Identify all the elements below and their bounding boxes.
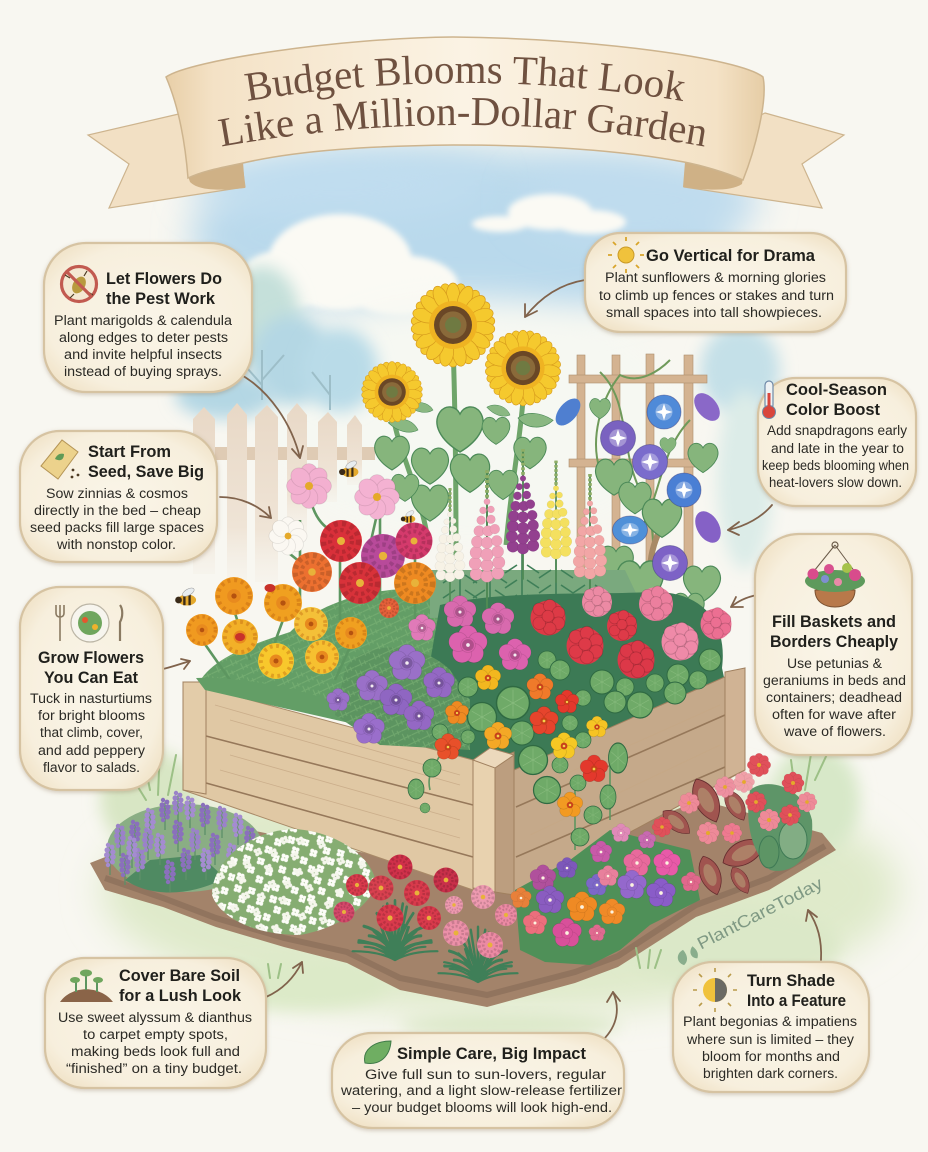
lavender bush (104, 791, 263, 893)
box posts (183, 668, 745, 895)
soil bed (90, 800, 836, 1007)
arrow: cool season (728, 505, 772, 535)
panel: Start From Seed, Save Big: seed packs fill large spaces (30, 520, 204, 535)
panel: Turn Shade Into a Feature: Turn Shade (747, 971, 835, 990)
panel: Grow Flowers You Can Eat: You Can Eat (44, 668, 138, 687)
panel: Cover Bare Soil for a Lush Look: making beds look full and (71, 1044, 240, 1059)
panel: Fill Baskets and Borders Cheaply: Borders Cheaply (770, 632, 899, 651)
panel: Fill Baskets and Borders Cheaply (755, 534, 912, 755)
background trees (175, 266, 773, 570)
panel: Start From Seed, Save Big: Seed, Save Big (88, 462, 204, 481)
alyssum mound (212, 829, 376, 935)
panel: Let Flowers Do the Pest Work: Let Flowers Do (106, 269, 222, 288)
panel: Turn Shade Into a Feature: brighten dark corners. (703, 1066, 838, 1081)
title banner (86, 36, 846, 209)
arrow: seed (220, 497, 271, 518)
panel: Turn Shade Into a Feature: bloom for months and (702, 1049, 840, 1064)
morning glories on trellis (551, 360, 726, 625)
panel: Grow Flowers You Can Eat (20, 587, 163, 790)
icon: thermometer (762, 381, 776, 418)
icon: seed packet (41, 440, 79, 479)
panel: Cover Bare Soil for a Lush Look: to carpet empty spots, (83, 1027, 228, 1042)
panel: Cover Bare Soil for a Lush Look: “finished” on a tiny budget. (66, 1061, 242, 1076)
begonia clump (652, 753, 817, 898)
right ribbon tail (684, 113, 844, 208)
trellis (569, 354, 707, 575)
panel: Go Vertical for Drama: small spaces into tall showpieces. (606, 305, 822, 320)
panel: Turn Shade Into a Feature: Into a Feature (747, 991, 846, 1010)
panel: Cover Bare Soil for a Lush Look: for a Lush Look (119, 986, 242, 1005)
watercolor sky and clouds (190, 150, 780, 540)
panel: Cool-Season Color Boost (758, 378, 916, 506)
left face of box (183, 682, 473, 890)
foliage mass (196, 505, 725, 775)
panel: Cool-Season Color Boost: and late in the year to (771, 441, 904, 456)
panel: Grow Flowers You Can Eat: flavor to salads. (43, 760, 140, 775)
banner title: Like a Million-Dollar Garden (218, 98, 704, 146)
panel: Let Flowers Do the Pest Work: Plant marigolds & calendula (54, 313, 233, 328)
arrow: edible (163, 659, 190, 669)
icon: half sun half shade (693, 968, 737, 1012)
panel: Start From Seed, Save Big (20, 431, 217, 562)
geraniums and round leaves (530, 586, 732, 718)
panel: Fill Baskets and Borders Cheaply: Use petunias & (787, 656, 882, 671)
panel: Let Flowers Do the Pest Work: the Pest Work (106, 289, 216, 308)
panel: Fill Baskets and Borders Cheaply: geraniums in beds and (763, 673, 906, 688)
arrow: pests (238, 373, 303, 458)
panel: Let Flowers Do the Pest Work: along edges to deter pests (59, 330, 228, 345)
arrow: care (603, 992, 620, 1040)
panel: Fill Baskets and Borders Cheaply: Fill Baskets and (772, 612, 896, 631)
panel: Grow Flowers You Can Eat: and add peppery (38, 743, 145, 758)
panel: Cover Bare Soil for a Lush Look: Cover Bare Soil (119, 966, 240, 985)
panel: Fill Baskets and Borders Cheaply: containers; deadhead (766, 690, 902, 705)
banner title: Budget Blooms That Look (244, 56, 685, 102)
panel: Simple Care, Big Impact: – your budget blooms will look high-end. (352, 1100, 612, 1115)
grass tufts (130, 747, 829, 978)
banner title (218, 56, 704, 146)
impatiens border (511, 823, 701, 965)
panel: Cool-Season Color Boost: keep beds blooming when (762, 458, 909, 473)
panel: Let Flowers Do the Pest Work: instead of buying sprays. (64, 364, 222, 379)
watermark: PlantCareToday: PlantCareToday (694, 874, 826, 953)
arrows (163, 280, 821, 1040)
icon: soil mound with seedlings (60, 970, 113, 1002)
icon: sun (608, 237, 644, 273)
left scroll curl (188, 162, 245, 190)
panel: Start From Seed, Save Big: Start From (88, 442, 171, 461)
marigolds (186, 577, 367, 679)
panel: Cool-Season Color Boost: heat-lovers slow down. (769, 475, 902, 490)
snapdragon spikes (435, 449, 607, 609)
panel: Simple Care, Big Impact (332, 1033, 624, 1128)
panel: Simple Care, Big Impact: watering, and a light slow-release fertilizer (340, 1083, 623, 1098)
banner body (166, 37, 764, 180)
left ribbon tail (88, 113, 245, 208)
panel: Cool-Season Color Boost: Add snapdragons early (767, 423, 907, 438)
panel: Grow Flowers You Can Eat: for bright blooms (38, 708, 145, 723)
arrow: vertical (525, 280, 585, 317)
panel: Cool-Season Color Boost: Color Boost (786, 400, 880, 419)
panel: Let Flowers Do the Pest Work (44, 243, 252, 392)
panel: Start From Seed, Save Big: directly in the bed – cheap (34, 503, 201, 518)
wooden fence (165, 403, 375, 582)
panel: Start From Seed, Save Big: Sow zinnias & cosmos (46, 486, 188, 501)
panel: Fill Baskets and Borders Cheaply: wave of flowers. (783, 724, 886, 739)
panel: Go Vertical for Drama: to climb up fences or stakes and turn (599, 288, 834, 303)
nasturtiums draping over box (408, 665, 628, 850)
sunflowers (355, 275, 568, 560)
panel: Go Vertical for Drama: Plant sunflowers & morning glories (605, 270, 826, 285)
arrow: soil (266, 962, 303, 997)
panel: Simple Care, Big Impact: Give full sun to sun-lovers, regular (365, 1067, 607, 1082)
right scroll curl (683, 162, 743, 190)
panel: Grow Flowers You Can Eat: Tuck in nasturtiums (30, 691, 152, 706)
green ground wash (100, 745, 900, 1037)
panel: Grow Flowers You Can Eat: that climb, cover, (40, 725, 143, 740)
panel: Grow Flowers You Can Eat: Grow Flowers (38, 648, 144, 667)
petunias (327, 596, 531, 750)
cosmos and zinnias (269, 464, 436, 618)
panel: Cover Bare Soil for a Lush Look: Use sweet alyssum & dianthus (58, 1010, 252, 1025)
panel: Go Vertical for Drama: Go Vertical for Drama (646, 246, 816, 265)
raised wooden bed (183, 668, 745, 895)
panel: Start From Seed, Save Big: with nonstop color. (56, 537, 176, 552)
panel: Let Flowers Do the Pest Work: and invite helpful insects (64, 347, 222, 362)
icon: plate with fork and knife (56, 604, 122, 642)
panel: Cool-Season Color Boost: Cool-Season (786, 380, 887, 399)
watermark: PlantCareToday (672, 874, 827, 966)
panel: Turn Shade Into a Feature: Plant begonias & impatiens (683, 1014, 857, 1029)
icon: no pests (62, 266, 96, 302)
panel: Go Vertical for Drama (585, 233, 846, 332)
icon: hanging basket (805, 542, 865, 607)
panel: Turn Shade Into a Feature: where sun is limited – they (686, 1032, 854, 1047)
bees (175, 459, 415, 605)
panel: Turn Shade Into a Feature (673, 962, 869, 1092)
arrow: shade (806, 910, 821, 960)
panel: Cover Bare Soil for a Lush Look (45, 958, 266, 1088)
icon: green leaf (365, 1041, 391, 1064)
panel: Fill Baskets and Borders Cheaply: often for wave after (772, 707, 897, 722)
foliage over box rim (196, 678, 420, 740)
right face of box (514, 668, 745, 895)
dianthus clump (334, 854, 517, 982)
arrow: baskets (731, 595, 757, 607)
panel: Simple Care, Big Impact: Simple Care, Big Impact (397, 1044, 586, 1063)
